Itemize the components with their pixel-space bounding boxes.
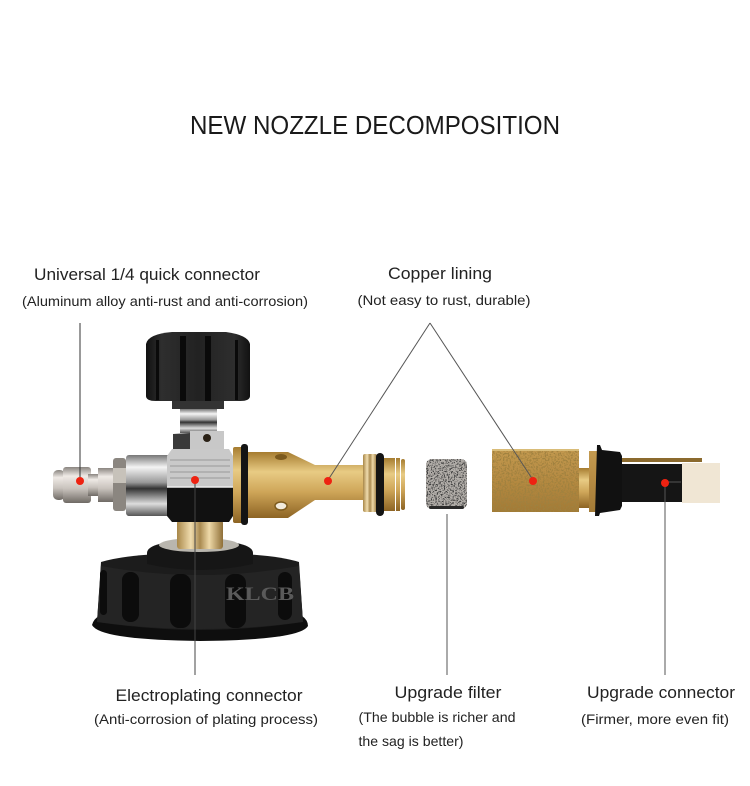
label: upgrade filter: (The bubble is richer and: [358, 709, 516, 725]
filter: [426, 459, 467, 509]
quick connector: [53, 458, 126, 511]
brass body: [233, 444, 405, 525]
title: NEW NOZZLE DECOMPOSITION: [190, 110, 560, 140]
chrome neck: [180, 409, 217, 433]
brass stem: [177, 520, 223, 549]
electroplating connector block: [167, 449, 233, 522]
label: upgrade filter: the sag is better): [358, 733, 464, 749]
label: copper lining: [358, 264, 530, 308]
watermark: KLCB: [226, 584, 294, 605]
label: upgrade connector: [581, 683, 735, 727]
brass sleeve: [492, 449, 579, 512]
label: electroplating connector: [94, 686, 318, 727]
chrome barrel: [126, 455, 170, 516]
red marker dots: [76, 476, 669, 487]
label: electroplating connector: (Anti-corrosion of plating process): [94, 711, 318, 727]
label: quick connector: (Aluminum alloy anti-rust and anti-corrosion): [22, 293, 308, 309]
adjustment knob: [146, 332, 250, 409]
label: upgrade filter: Upgrade filter: [394, 683, 502, 702]
label: electroplating connector: Electroplating connector: [116, 686, 303, 705]
label: quick connector: [22, 265, 308, 309]
label: copper lining: (Not easy to rust, durable): [358, 292, 530, 308]
bottle cap: [92, 538, 308, 641]
label: upgrade connector: (Firmer, more even fit): [581, 711, 729, 727]
upgrade connector part: [579, 445, 720, 516]
label: quick connector: Universal 1/4 quick connector: [34, 265, 260, 284]
foam nozzle assembly: [53, 332, 405, 641]
label: upgrade filter: [358, 683, 516, 749]
leader lines: [80, 323, 665, 675]
label: upgrade connector: Upgrade connector: [587, 683, 735, 702]
label: copper lining: Copper lining: [388, 264, 492, 283]
